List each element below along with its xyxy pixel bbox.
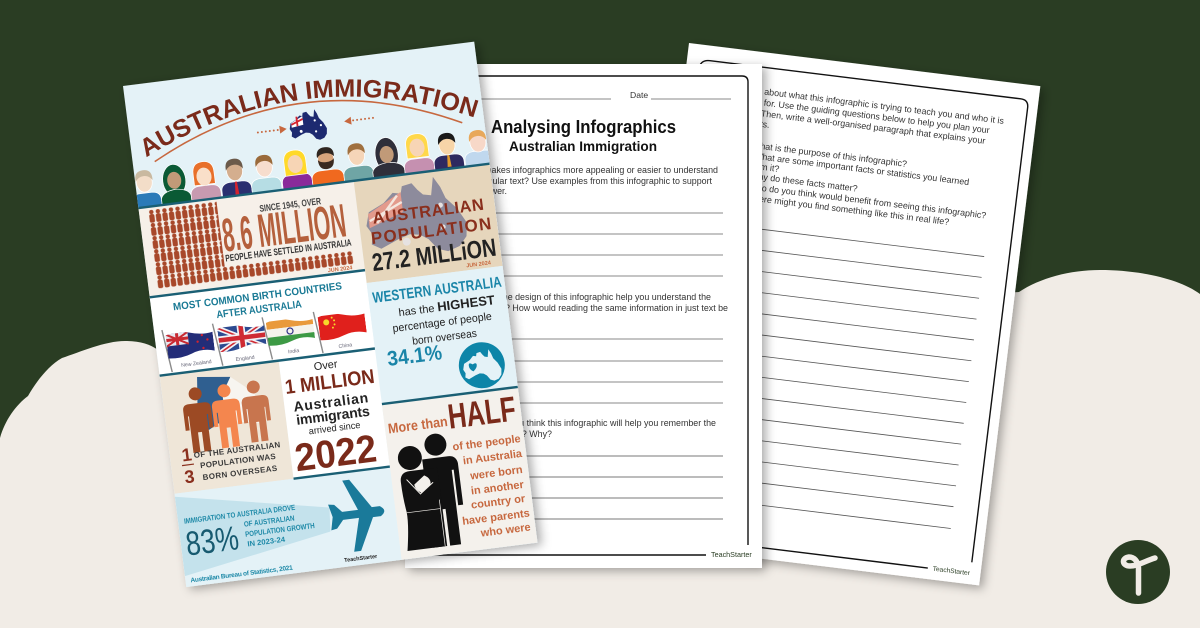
icon: plane [325,476,389,554]
back page logo text: TeachStarter [932,566,971,577]
map with flag [366,177,467,252]
half text: were born [469,464,524,483]
back page instructions: • Where might you find something like this in real life? [740,191,950,227]
person 12 [464,130,490,166]
person icon 2 [209,383,245,449]
person 4 [222,158,252,196]
half text: of the people [452,433,521,453]
Population: POPULATION [370,214,492,248]
flag: China [317,311,367,341]
icon: circle map [456,340,508,391]
panel: one third [171,368,284,487]
arrived since: arrived since [308,420,361,437]
person 9 [372,137,405,178]
half text: who were [479,521,531,540]
flag labels: China [338,342,353,350]
person 8 [344,143,374,181]
person 11 [434,132,465,170]
person 7 [312,147,344,185]
date note: JUN 2024 [466,260,492,269]
panel: more than half [385,389,533,552]
people have settled: PEOPLE HAVE SETTLED IN AUSTRALIA [225,238,352,264]
person 2 [161,164,192,204]
rest of statement: OF AUSTRALIAN [243,513,295,529]
question 1: What makes infographics more appealing or easier to understand [461,165,718,175]
half text: have parents [462,507,530,528]
panel: most common birth countries [159,278,369,373]
answer lines 3 [440,456,723,519]
HALF: HALF [446,389,518,437]
flag labels: England [235,355,255,363]
worksheet: back page [628,43,1040,585]
one third text [193,440,284,483]
back page instructions: from it? [749,160,780,174]
immigrants: immigrants [295,403,371,428]
worksheet title: Analysing Infographics [491,117,676,137]
person 5 [251,154,282,192]
front page logo text: TeachStarter [711,550,752,559]
back page instructions: • Who do you think would benefit from seeing this infographic? [743,181,987,220]
27.2 million: 27.2 MILLiON [370,234,498,277]
fraction one third: 1 [181,444,193,465]
name and date row: Date [630,90,648,100]
background: cream hills [0,270,1200,628]
person 1 [135,170,162,208]
half text: country or [470,493,527,512]
flag: India [266,319,315,346]
poster: Australian Immigration infographic [123,42,547,594]
half text [452,433,533,542]
rest of statement: POPULATION GROWTH [245,521,315,539]
worksheet subtitle: Australian Immigration [509,139,657,154]
answer lines 1 [440,213,723,276]
flag poles [162,310,323,373]
back page instructions: made for. Use the guiding questions below to help you plan your [739,95,990,135]
one third text: OF THE AUSTRALIAN [193,440,281,460]
back page instructions: Think about what this infographic is trying to teach you and who it is [740,84,1005,126]
back page instructions: thoughts. [733,116,770,130]
highest percentage text [390,292,499,350]
rest of statement: IN 2023-24 [247,535,286,548]
person icon 3 [239,379,274,443]
half text: in Australia [462,448,524,467]
highest percentage text: percentage of people [392,311,493,335]
question 2: different? [463,313,500,323]
heading: MOST COMMON BIRTH COUNTRIES [172,280,343,313]
heading line 2: AFTER AUSTRALIA [216,298,303,321]
worksheet: front page [405,64,762,568]
flag labels [181,341,353,370]
More than: More than [387,413,449,436]
panel: 83 percent plane [175,471,390,585]
back page instructions: • What are some important facts or statistics you learned [748,150,970,187]
people row [135,130,490,208]
back page instructions: • Why do these facts matter? [744,170,858,194]
2022: 2022 [292,427,379,480]
one third text: BORN OVERSEAS [202,464,278,482]
panel: 8.6 million settlers [148,198,354,289]
highest percentage text: born overseas [412,328,478,348]
half text: in another [470,479,525,498]
question 2 [458,292,728,323]
back page writing lines [674,223,984,529]
light beam [175,478,336,576]
people icon grid [148,202,354,289]
back page instructions: ideas. Then, write a well-organised paragraph that explains your [735,105,986,146]
fraction one third: 3 [183,466,196,487]
answer lines 2 [440,339,723,403]
person 3 [190,161,222,200]
Over: Over [313,358,339,373]
immigration line: IMMIGRATION TO AUSTRALIA DROVE [183,503,296,526]
person icon 1 [180,386,216,454]
question 3 [478,418,716,439]
source: Australian Bureau of Statistics, 2021 [190,565,294,584]
icon: family silhouette [393,431,468,551]
panel backgrounds [138,164,538,587]
flag labels: India [288,348,300,355]
34.1 percent: 34.1% [386,341,444,371]
question 1 [457,165,718,196]
fraction one third [180,444,197,487]
1 million: 1 MILLION [284,366,376,399]
poster logo text: TeachStarter [344,554,378,564]
logo: Teach Starter circle [1106,540,1170,604]
Australian: Australian [293,389,369,415]
poster title: AUSTRALIAN IMMIGRATION [143,79,478,158]
panel: western australia [372,274,515,401]
83 percent: 83% [184,519,241,564]
question 3: Do you think this infographic will help you remember the [496,418,716,428]
question 2: How does the design of this infographic help you understand the [458,292,711,302]
back page instructions: • What is the purpose of this infographic? [746,139,908,169]
back page instructions [724,83,1005,232]
icon: Australia flag map [290,109,327,140]
date note: JUN 2024 [327,265,354,274]
poster: Australian Immigration infographic: 8.6 MILLION [219,193,349,261]
question 2: information? How would reading the same information in just text be [461,303,728,313]
since 1945 over: SINCE 1945, OVER [259,196,322,215]
divider lines [138,164,526,494]
background map [194,370,262,431]
Australian: AUSTRALIAN [371,196,485,228]
person 6 [282,150,312,188]
flag: England [217,325,266,352]
title underline arc [154,100,462,162]
question 1: than regular text? Use examples from this infographic to support [460,176,713,186]
arrow: right dotted [344,116,374,125]
person 10 [404,133,434,174]
flag labels: New Zealand [181,359,212,369]
question 1: your answer. [457,186,507,196]
panel: over 1 million [282,354,386,480]
panel: Australian population [366,177,496,271]
flag: New Zealand [166,332,215,358]
arrow: left dotted [256,126,287,134]
one third text: POPULATION WAS [200,452,277,470]
heading: WESTERN AUSTRALIA [372,274,503,307]
rest of statement [243,511,316,549]
highest percentage text: has the HIGHEST [398,292,496,319]
question 3: information? Why? [478,429,552,439]
